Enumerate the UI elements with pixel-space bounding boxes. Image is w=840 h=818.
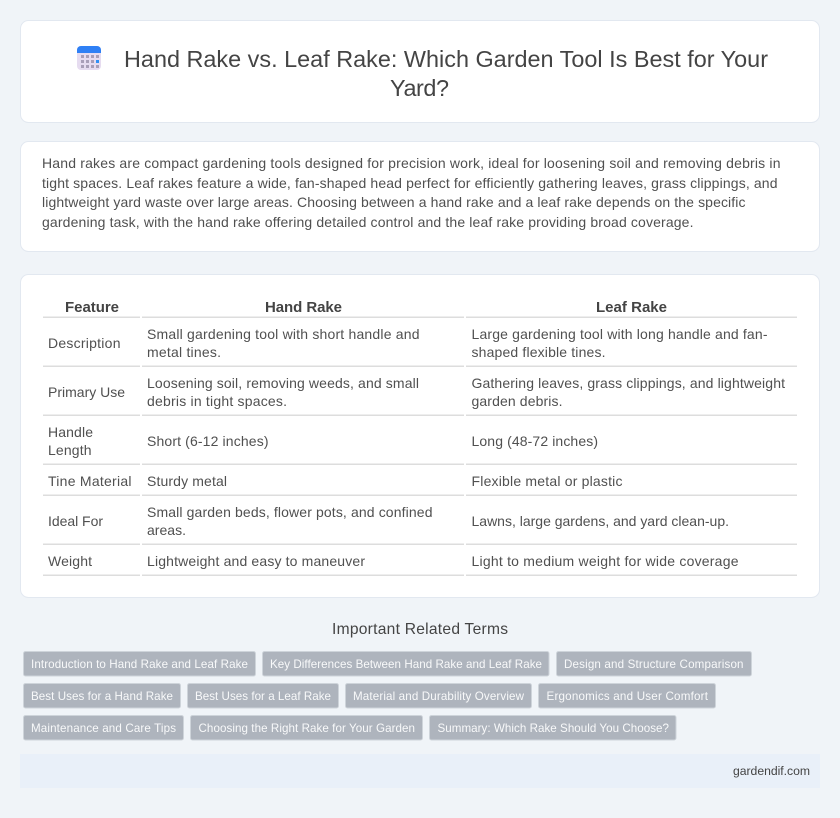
row: primary use: Primary Use [48, 384, 125, 400]
panel: comparison table [20, 274, 820, 598]
row: description: Small gardening tool with short handle and [147, 326, 420, 342]
row: ideal for: Ideal For [48, 513, 103, 529]
row: weight: Weight [48, 553, 92, 569]
row: ideal for [48, 504, 729, 538]
tag: Summary: Which Rake Should You Choose? [438, 722, 670, 735]
row: tine material: Flexible metal or plastic [472, 473, 622, 489]
title: Hand Rake vs. Leaf Rake: Which Garden Tool Is Best for Your [124, 46, 768, 72]
tag [538, 684, 716, 708]
row: primary use: Gathering leaves, grass clippings, and lightweight [472, 375, 785, 391]
row: handle length: Handle [48, 424, 93, 440]
title [124, 46, 768, 101]
tag [430, 716, 676, 740]
intro paragraph: gardening task, with the hand rake offering detailed control and the leaf rake providing broad coverage. [42, 214, 694, 230]
tag: Introduction to Hand Rake and Leaf Rake [31, 658, 248, 671]
table header [65, 299, 667, 316]
tag [188, 684, 338, 708]
row: description: Large gardening tool with long handle and fan- [472, 326, 768, 342]
row: tine material: Tine Material [48, 473, 132, 489]
footer: gardendif.com [733, 764, 810, 778]
tag [190, 716, 422, 740]
row: description: shaped flexible tines. [472, 344, 606, 360]
row: ideal for: Lawns, large gardens, and yard clean-up. [472, 513, 729, 529]
tag [262, 652, 549, 676]
tag: Choosing the Right Rake for Your Garden [198, 722, 415, 735]
intro paragraph: tight spaces. Leaf rakes feature a wide, fan-shaped head perfect for efficiently gathering leaves, grass clippings, and [42, 175, 778, 191]
row: description: Description [48, 335, 120, 351]
tag: Best Uses for a Hand Rake [31, 690, 173, 703]
intro paragraph: lightweight yard waste over large areas. Choosing between a hand rake and a leaf rake depends on the specific [42, 194, 746, 210]
row: description [48, 326, 768, 360]
tag: Ergonomics and User Comfort [546, 690, 709, 703]
tag: Design and Structure Comparison [564, 658, 744, 671]
row: handle length: Long (48-72 inches) [472, 433, 598, 449]
row: tine material: Sturdy metal [147, 473, 227, 489]
table header: Hand Rake [265, 299, 342, 316]
tag [24, 684, 180, 708]
tag [24, 652, 256, 676]
tag: Material and Durability Overview [353, 690, 525, 703]
tag: Best Uses for a Leaf Rake [195, 690, 331, 703]
tag: Maintenance and Care Tips [31, 722, 176, 735]
intro paragraph [42, 155, 780, 230]
tag [346, 684, 532, 708]
row: tine material [48, 473, 622, 489]
footer [20, 754, 820, 788]
row: primary use: debris in tight spaces. [147, 393, 287, 409]
row: primary use: Loosening soil, removing weeds, and small [147, 375, 419, 391]
row: handle length: Length [48, 442, 92, 458]
panel: title header [20, 20, 820, 122]
icon: calendar [77, 46, 101, 70]
row: primary use [48, 375, 785, 409]
table header: Leaf Rake [596, 299, 667, 316]
tag [556, 652, 752, 676]
related term tags [24, 652, 752, 740]
row: primary use: garden debris. [472, 393, 562, 409]
row: ideal for: Small garden beds, flower pots, and confined [147, 504, 432, 520]
panel: introduction [20, 142, 820, 252]
intro paragraph: Hand rakes are compact gardening tools designed for precision work, ideal for loosening soil and removing debris in [42, 155, 780, 171]
title: Yard? [390, 75, 449, 101]
row: ideal for: areas. [147, 522, 186, 538]
row: weight [48, 553, 739, 569]
row: handle length [48, 424, 598, 458]
tag [24, 716, 184, 740]
tag: Key Differences Between Hand Rake and Leaf Rake [270, 658, 542, 671]
table header: Feature [65, 299, 119, 316]
row: weight: Lightweight and easy to maneuver [147, 553, 365, 569]
heading: important related terms: Important Related Terms [332, 621, 508, 638]
row: handle length: Short (6-12 inches) [147, 433, 268, 449]
row: weight: Light to medium weight for wide coverage [472, 553, 739, 569]
row: description: metal tines. [147, 344, 221, 360]
